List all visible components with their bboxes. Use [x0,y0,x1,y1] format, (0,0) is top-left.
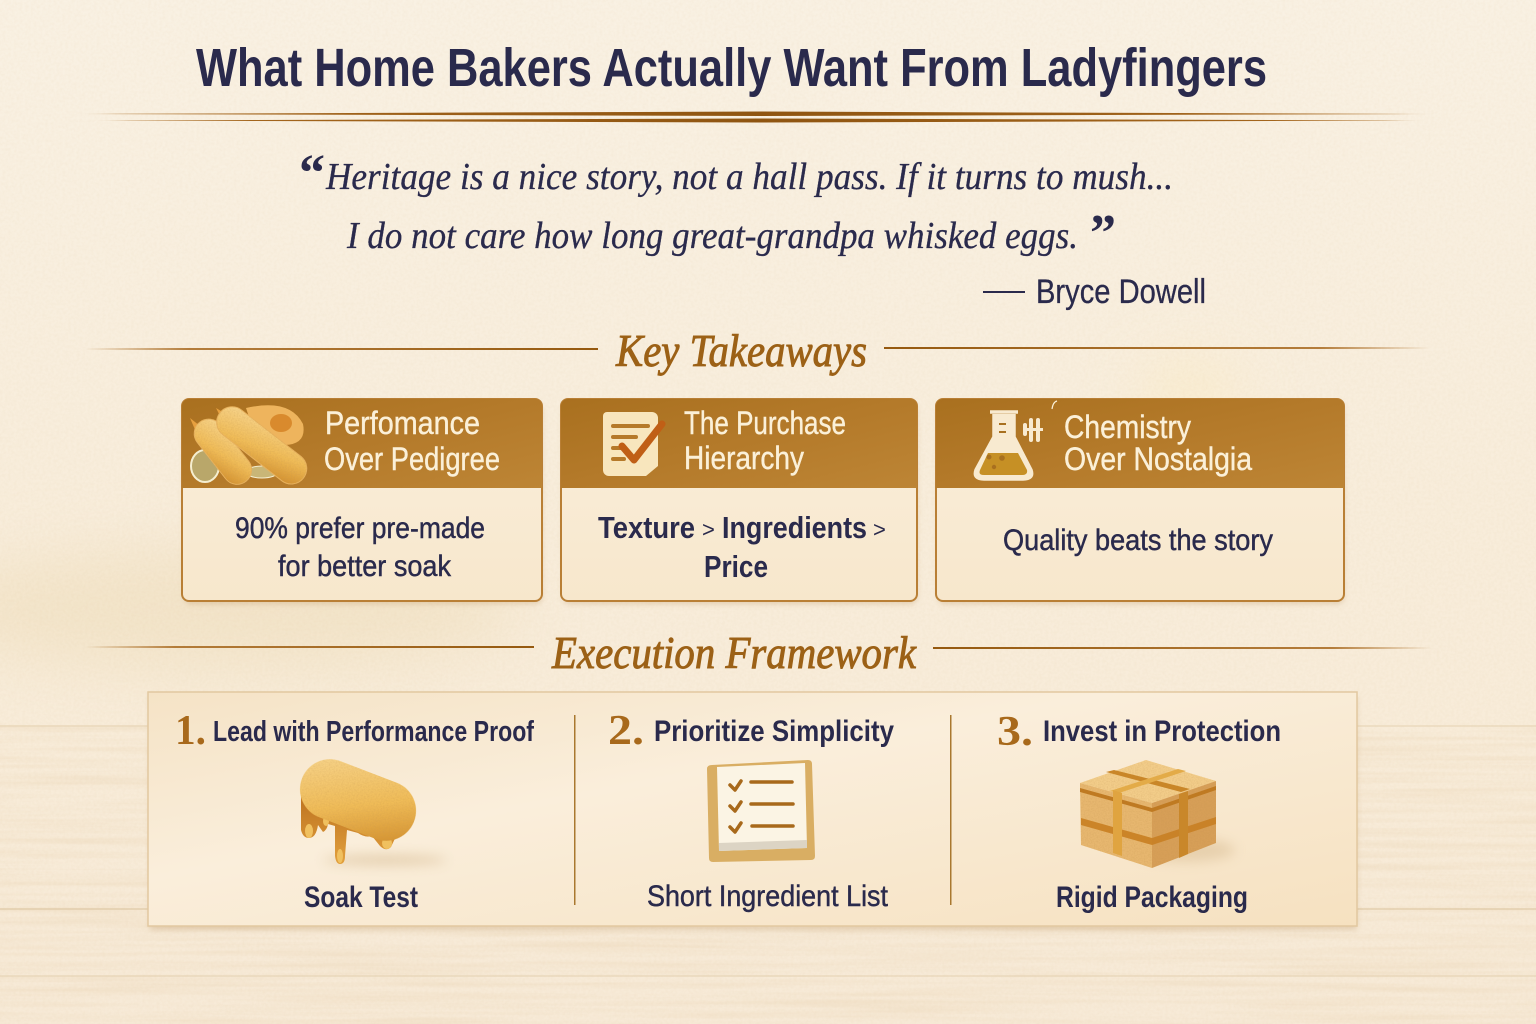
card body: 90% prefer pre-made [235,512,485,545]
card heading: The Purchase [684,405,846,441]
step 2 [608,708,894,913]
icon: rigid package box [1080,760,1235,868]
step 1 [175,708,534,914]
card heading: Perfomance [325,405,480,441]
step 1 label: Soak Test [304,881,418,914]
icon: soaked ladyfinger [291,750,447,865]
card: The Purchase Hierarchy [561,399,917,604]
attribution: Bryce Dowell [1036,273,1206,311]
card heading: Over Nostalgia [1064,441,1252,477]
step 2 heading: 2. [608,708,644,754]
quote line one: Heritage is a nice story, not a hall pass. If it turns to mush... [325,156,1173,198]
step 2 label: Short Ingredient List [647,880,889,913]
opening quote mark: “ [299,145,325,202]
card body: Ingredients [722,510,867,545]
section heading: Execution Framework: Execution Framework [551,628,917,678]
card body: > [873,517,886,542]
step 3 heading: Invest in Protection [1043,715,1281,748]
step 2 heading [608,708,894,754]
closing quote mark: ” [1090,205,1116,262]
icon: ladyfingers [188,401,313,490]
card body [235,512,485,583]
icon: flask [975,401,1057,479]
card heading [1064,409,1252,477]
title: What Home Bakers Actually Want From Ladyfingers [196,38,1267,98]
step 3 heading [997,709,1281,755]
step 1 heading: 1. [175,708,206,754]
card body: Price [704,549,768,584]
card heading: Over Pedigree [324,441,500,477]
card body: Quality beats the story [1003,524,1273,557]
panel: execution framework [148,692,1357,930]
card body: Texture [598,510,695,545]
section heading: Key Takeaways: Key Takeaways [615,326,867,376]
card body: > [702,517,715,542]
step 3 label: Rigid Packaging [1056,881,1248,914]
step 3 heading: 3. [997,709,1033,755]
step 1 heading: Lead with Performance Proof [213,716,534,748]
card: Performance Over Pedigree [182,399,542,604]
step 3 [997,709,1281,914]
card: Chemistry Over Nostalgia [936,399,1344,604]
card heading: Chemistry [1064,409,1191,445]
card heading: Hierarchy [684,440,804,476]
title double rule [75,112,1437,122]
card heading [684,405,846,476]
card body [598,510,886,584]
icon: checklist note [603,412,662,476]
card heading [324,405,500,477]
icon: ingredient list [707,760,815,862]
card body: for better soak [278,550,452,583]
pull quote [299,145,1206,311]
quote line two: I do not care how long great-grandpa whisked eggs. [346,215,1078,257]
step 1 heading [175,708,534,754]
step 2 heading: Prioritize Simplicity [654,715,894,748]
